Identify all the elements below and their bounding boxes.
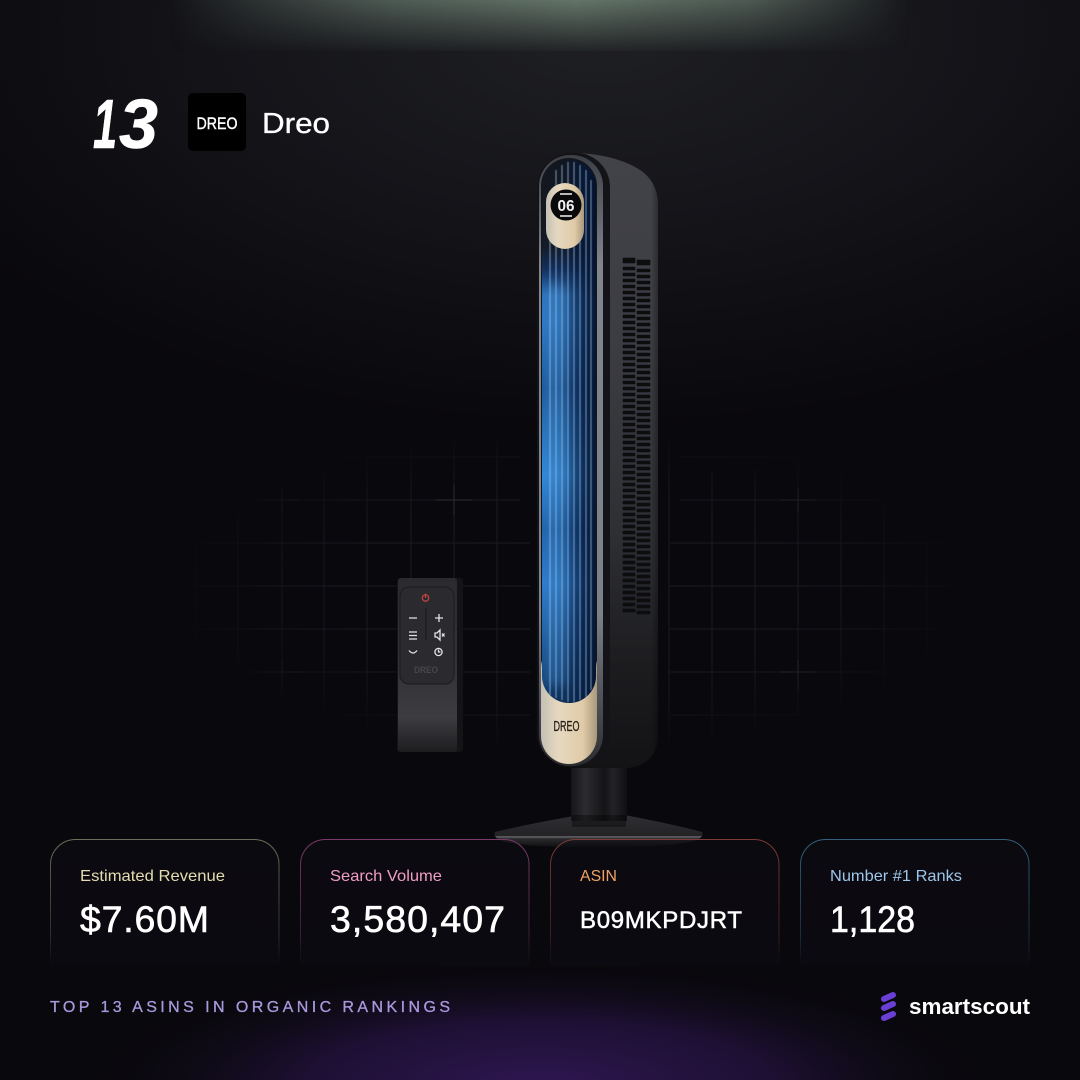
- wordmark: smartscout: [909, 994, 1031, 1019]
- stat card: number one ranks: Number #1 Ranks: [830, 868, 962, 885]
- brand name: Dreo: [262, 108, 330, 140]
- rank number: [93, 85, 158, 164]
- background grid: [228, 451, 912, 729]
- control display panel: 06: [558, 198, 575, 215]
- remote control: [397, 578, 463, 752]
- stat card: asin: [550, 840, 779, 965]
- stat card: asin: ASIN: [580, 868, 617, 885]
- tower fan product: [494, 153, 702, 847]
- side vents: [623, 258, 650, 614]
- fan blue airflow grille: [542, 160, 596, 703]
- stat card: search volume: [300, 840, 529, 965]
- brand logo: DREO: [196, 114, 238, 133]
- rank number: 1: [93, 85, 117, 164]
- stat card: search volume: Search Volume: [330, 868, 442, 885]
- stat card: estimated revenue: [50, 840, 279, 965]
- brand logo: [188, 93, 246, 151]
- power button: [422, 594, 429, 601]
- remote logo: DREO: [414, 665, 438, 675]
- remote buttons: [409, 614, 444, 656]
- fan body side: [572, 153, 658, 768]
- rank number: 3: [119, 85, 158, 163]
- stat card: asin: B09MKPDJRT: [580, 907, 742, 934]
- stat card: estimated revenue: $7.60M: [80, 898, 209, 940]
- smartscout logo: [884, 994, 1031, 1019]
- stat card: estimated revenue: Estimated Revenue: [80, 868, 225, 885]
- fan front panel: [537, 153, 610, 767]
- icon: smartscout mark: [884, 995, 893, 1018]
- control display panel: [546, 183, 584, 249]
- footer tagline: TOP 13 ASINS IN ORGANIC RANKINGS: [50, 999, 450, 1016]
- fan stand and base: [494, 755, 702, 847]
- stat card: search volume: 3,580,407: [330, 898, 505, 940]
- stat card: number one ranks: [800, 840, 1029, 965]
- stat card: number one ranks: 1,128: [830, 898, 915, 940]
- fan gold foot logo: DREO: [554, 718, 580, 735]
